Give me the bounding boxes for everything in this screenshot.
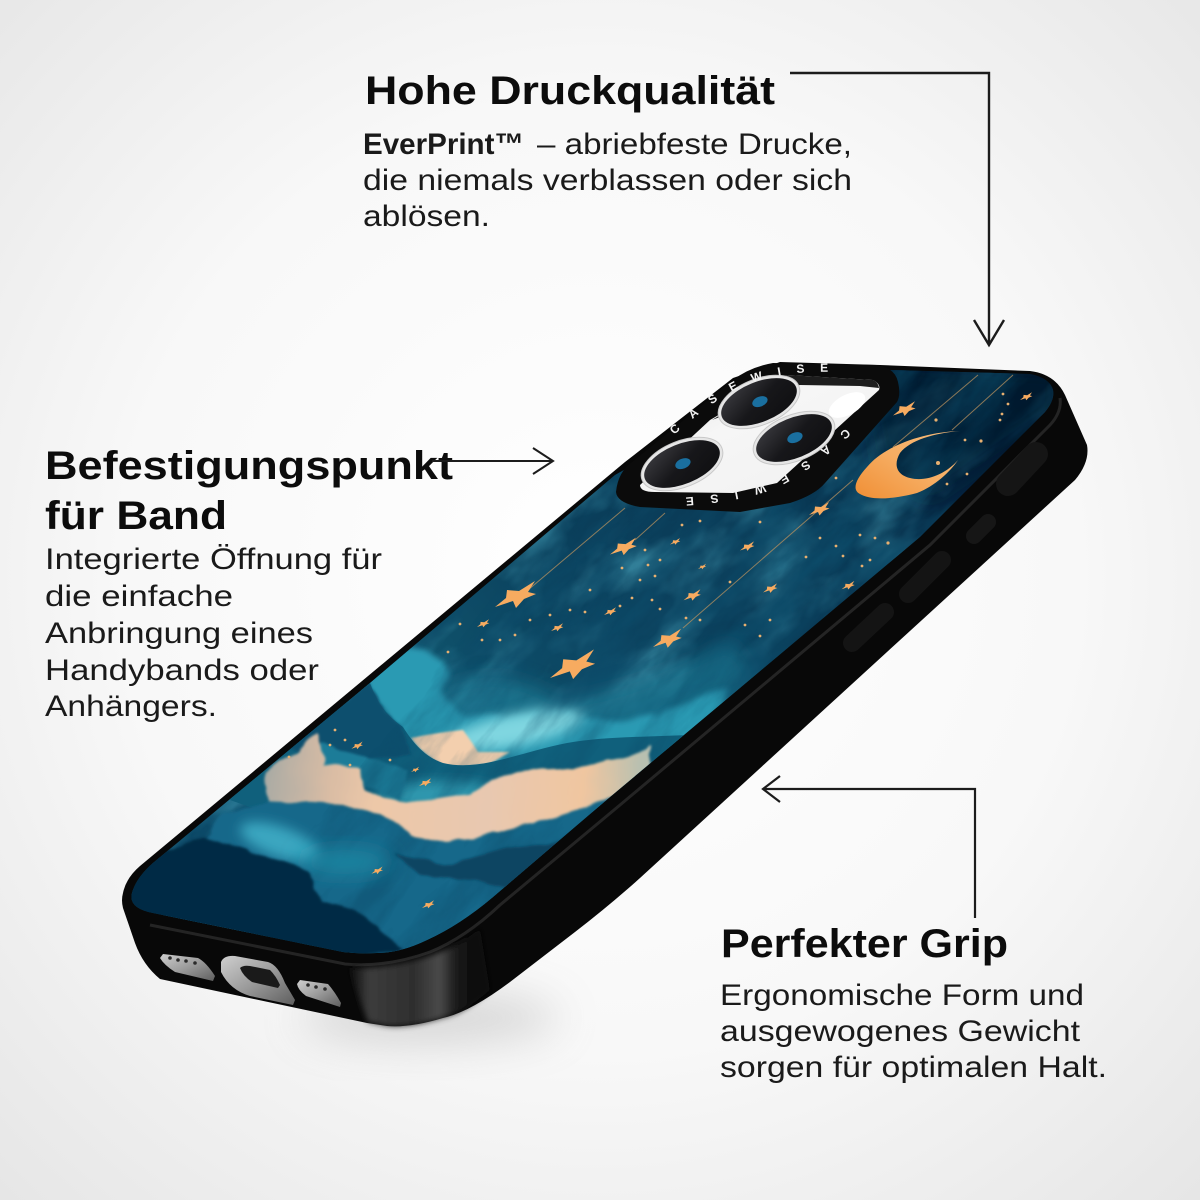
body text	[363, 128, 852, 233]
arrow: grip	[763, 776, 975, 918]
lower streak mottling	[331, 370, 1005, 948]
camera well	[640, 375, 879, 493]
heading: Befestigungspunkt	[45, 444, 453, 488]
body text: Handybands oder	[45, 654, 319, 687]
body text: EverPrint™	[363, 128, 524, 161]
upper left dark wedge	[291, 683, 410, 758]
body text: ausgewogenes Gewicht	[720, 1015, 1081, 1048]
small star dots	[288, 393, 1009, 766]
body text: Ergonomische Form und	[720, 979, 1084, 1012]
lens left	[634, 427, 730, 501]
brand text upper: CASEWISE	[670, 364, 828, 434]
arrow: lanyard attachment	[432, 448, 553, 474]
power button	[1008, 454, 1036, 484]
speaker right	[297, 980, 341, 1007]
volume down	[852, 612, 885, 643]
dark mountain right	[396, 840, 558, 888]
bottom ports	[160, 954, 341, 1007]
arrow: print quality	[790, 73, 1004, 345]
camera bump	[616, 363, 900, 512]
corner highlight	[350, 928, 490, 1026]
dark cloud mottling	[182, 370, 1054, 920]
speaker holes	[168, 956, 327, 991]
body text: Anbringung eines	[45, 617, 313, 650]
phone case	[122, 362, 1088, 1058]
printed night sky artwork	[131, 370, 1054, 954]
body text: sorgen für optimalen Halt.	[720, 1051, 1107, 1084]
body text	[720, 979, 1107, 1084]
usb-c port	[221, 956, 295, 1005]
ground shadow	[300, 994, 560, 1042]
dark sky corner	[869, 370, 1053, 501]
heading: Hohe Druckqualität	[365, 69, 775, 113]
body text: ablösen.	[363, 200, 490, 233]
crescent moon	[856, 431, 960, 498]
flash	[825, 387, 869, 423]
teal cloud	[360, 647, 730, 772]
case body	[122, 362, 1088, 1026]
wave band	[230, 683, 684, 812]
lens right	[746, 401, 842, 475]
usb-c opening	[240, 966, 280, 988]
hanging strings	[528, 375, 1013, 628]
large stars	[351, 392, 1032, 908]
left teal wash	[320, 742, 408, 799]
body text	[45, 543, 382, 723]
inner frame rim	[150, 398, 1060, 965]
peach cloud upper	[411, 730, 510, 768]
action button	[974, 522, 988, 536]
side buttons	[852, 454, 1036, 643]
heading	[45, 444, 453, 538]
sky base	[132, 370, 1054, 954]
volume up	[908, 560, 942, 594]
body text: die einfache	[45, 580, 233, 613]
dark mountain bottom	[120, 837, 402, 960]
bump ring	[616, 363, 899, 512]
mid teal patch	[300, 850, 390, 874]
teal between wave and peach	[374, 775, 488, 804]
lens top	[711, 365, 807, 439]
callout: grip	[720, 922, 1107, 1084]
bright lower patch	[236, 816, 322, 867]
body text: Anhängers.	[45, 690, 217, 723]
brand text lower: CASEWISE	[686, 430, 850, 506]
speaker left	[160, 954, 215, 981]
heading: Perfekter Grip	[721, 922, 1008, 966]
callout: print quality	[363, 69, 852, 233]
cloud glow	[450, 701, 588, 754]
lighter cloud mottling	[169, 372, 1054, 954]
body text: Integrierte Öffnung für	[45, 543, 382, 576]
body text: die niemals verblassen oder sich	[363, 164, 852, 197]
peach cloud lower	[263, 735, 650, 842]
inner wall shading	[712, 375, 879, 420]
lower teal band	[160, 790, 610, 960]
soft teal haze	[447, 638, 754, 724]
heading: für Band	[45, 494, 227, 538]
body text: – abriebfeste Drucke,	[537, 128, 852, 161]
callout: lanyard attachment	[45, 444, 453, 723]
